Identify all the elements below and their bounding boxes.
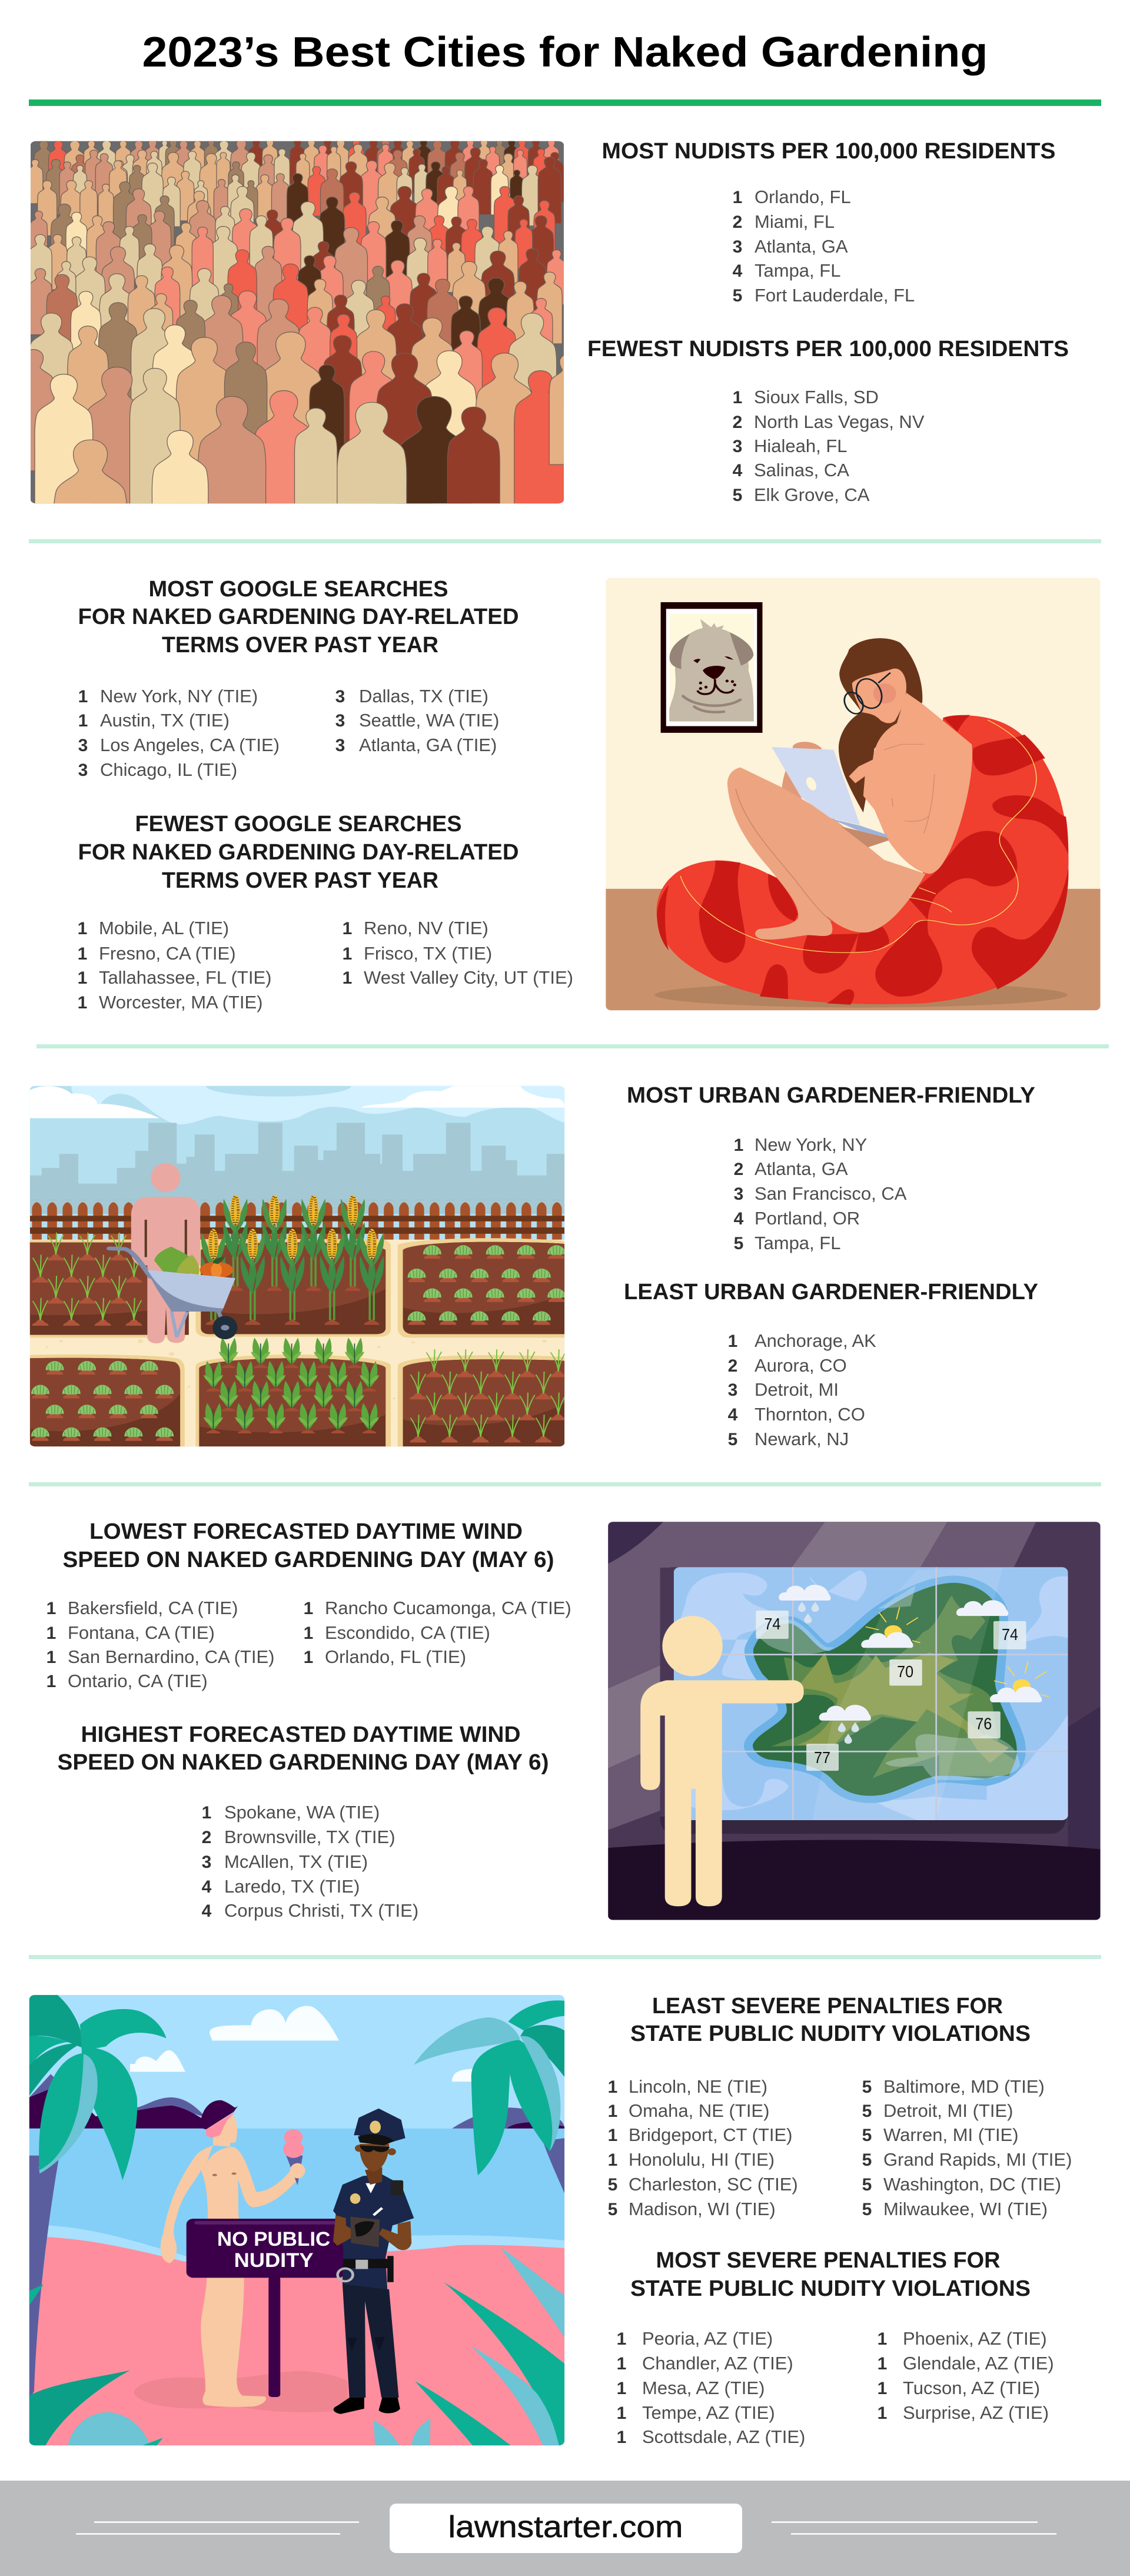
skyline xyxy=(30,1123,564,1214)
list: fewest google searches: 1 xyxy=(343,919,352,938)
list: fewest nudists: 5 xyxy=(733,486,742,505)
list: least severe penalties: 1 xyxy=(608,2102,617,2121)
list: fewest nudists: 3 xyxy=(733,437,742,456)
list: most severe penalties: 1 xyxy=(617,2428,626,2447)
framed dog portrait xyxy=(661,602,763,733)
cabbages xyxy=(31,1245,566,1441)
temperature labels: 76 xyxy=(975,1714,992,1733)
list: lowest wind speed: 1 xyxy=(304,1648,313,1667)
illustration: beach, officer and no public nudity sign xyxy=(29,1995,565,2445)
list: fewest google searches: 1 xyxy=(343,968,352,988)
list: least severe penalties: 5 xyxy=(862,2150,872,2170)
laptop xyxy=(772,747,889,847)
list: most google searches: Los Angeles, CA (TIE) xyxy=(100,735,280,755)
list: fewest google searches: 1 xyxy=(78,944,87,964)
list: most google searches: Austin, TX (TIE) xyxy=(100,710,230,731)
footer: lawnstarter.com xyxy=(448,2510,683,2544)
weather map xyxy=(674,1567,1068,1820)
fence xyxy=(30,1200,564,1241)
list: most google searches: 3 xyxy=(335,687,345,706)
list: most urban gardener-friendly: Tampa, FL xyxy=(755,1233,840,1253)
title: 2023’s Best Cities for Naked Gardening xyxy=(142,29,988,76)
face xyxy=(852,669,906,723)
list: lowest wind speed: 1 xyxy=(46,1648,56,1667)
list: least severe penalties: Honolulu, HI (TIE) xyxy=(629,2149,775,2170)
list: lowest wind speed: 1 xyxy=(46,1599,56,1618)
heading: lowest wind speed: SPEED ON NAKED GARDENING DAY (MAY 6) xyxy=(62,1548,554,1572)
list: least severe penalties: 5 xyxy=(862,2102,872,2121)
list: most google searches: New York, NY (TIE) xyxy=(100,686,258,706)
list: fewest google searches: 1 xyxy=(78,919,87,938)
path speckle xyxy=(46,1339,547,1399)
list: fewest google searches: West Valley City, UT (TIE) xyxy=(364,967,573,988)
sign: no public nudity: NUDITY xyxy=(234,2249,314,2272)
list: least urban gardener-friendly: Newark, NJ xyxy=(755,1429,849,1449)
near leg xyxy=(727,768,926,940)
heading: fewest google searches xyxy=(78,812,519,893)
illustration: crowd of silhouettes xyxy=(31,141,564,504)
heading: most urban gardener-friendly: MOST URBAN GARDENER-FRIENDLY xyxy=(627,1083,1035,1108)
presenter figure xyxy=(640,1616,804,1906)
list: least urban gardener-friendly xyxy=(728,1330,876,1449)
list: highest wind speed xyxy=(202,1802,418,1921)
list: most severe penalties: Glendale, AZ (TIE) xyxy=(903,2353,1054,2373)
heading: most nudists: MOST NUDISTS PER 100,000 RESIDENTS xyxy=(601,139,1056,164)
sign: no public nudity xyxy=(187,2219,345,2397)
list: lowest wind speed: 1 xyxy=(46,1624,56,1643)
list: fewest google searches: Reno, NV (TIE) xyxy=(364,918,488,938)
list: most nudists: Orlando, FL xyxy=(755,187,851,207)
police officer xyxy=(333,2109,414,2414)
list: least severe penalties: Charleston, SC (TIE) xyxy=(629,2174,798,2195)
list: least severe penalties: Warren, MI (TIE) xyxy=(883,2124,1019,2145)
list: most urban gardener-friendly: 1 xyxy=(734,1136,743,1155)
list: most urban gardener-friendly: San Francisco, CA xyxy=(755,1183,907,1204)
list: most severe penalties: 1 xyxy=(878,2329,887,2349)
illustration: weather map presenter xyxy=(608,1522,1101,1920)
list: most severe penalties: Chandler, AZ (TIE) xyxy=(642,2353,793,2373)
list: fewest nudists: Hialeah, FL xyxy=(754,436,848,456)
list: least severe penalties: 5 xyxy=(608,2175,617,2195)
list: most nudists xyxy=(733,187,915,306)
heading: most google searches: TERMS OVER PAST YEAR xyxy=(162,633,438,658)
list: most severe penalties: Tucson, AZ (TIE) xyxy=(903,2378,1040,2398)
heading: fewest google searches: FEWEST GOOGLE SEARCHES xyxy=(135,812,461,836)
list: most google searches: 3 xyxy=(78,761,88,780)
list: most nudists: Fort Lauderdale, FL xyxy=(755,285,915,306)
list: least urban gardener-friendly: Aurora, CO xyxy=(755,1355,847,1376)
title underline xyxy=(29,99,1101,106)
list: least urban gardener-friendly: Anchorage, AK xyxy=(755,1330,876,1351)
list: most urban gardener-friendly: New York, NY xyxy=(755,1134,867,1155)
list: most google searches xyxy=(78,686,499,780)
list: most severe penalties xyxy=(617,2328,1054,2447)
list: most urban gardener-friendly: Portland, OR xyxy=(755,1208,860,1229)
list: least severe penalties: 1 xyxy=(608,2077,617,2097)
wheelbarrow xyxy=(109,1247,237,1339)
list: least severe penalties: Omaha, NE (TIE) xyxy=(629,2100,769,2121)
list: fewest google searches: 1 xyxy=(343,944,352,964)
list: most nudists: Tampa, FL xyxy=(755,260,840,281)
list: lowest wind speed: Rancho Cucamonga, CA (TIE) xyxy=(325,1598,571,1618)
list: most google searches: Chicago, IL (TIE) xyxy=(100,759,237,780)
list: fewest nudists: 1 xyxy=(733,388,742,407)
list: least severe penalties xyxy=(608,2076,1072,2219)
heading: least urban gardener-friendly: LEAST URBAN GARDENER-FRIENDLY xyxy=(624,1280,1038,1304)
leafy plants xyxy=(204,1337,379,1433)
list: most severe penalties: 1 xyxy=(617,2404,626,2423)
list: highest wind speed: Corpus Christi, TX (TIE) xyxy=(224,1900,418,1921)
list: least severe penalties: Lincoln, NE (TIE) xyxy=(629,2076,767,2097)
temperature labels: 74 xyxy=(1002,1625,1018,1644)
list: fewest google searches: Mobile, AL (TIE) xyxy=(99,918,229,938)
list: most severe penalties: 1 xyxy=(617,2329,626,2349)
heading: most google searches: FOR NAKED GARDENING DAY-RELATED xyxy=(78,605,519,629)
list: most google searches: Atlanta, GA (TIE) xyxy=(359,735,497,755)
list: fewest google searches: Fresno, CA (TIE) xyxy=(99,943,236,964)
list: fewest google searches: Tallahassee, FL (TIE) xyxy=(99,967,271,988)
heading: lowest wind speed: LOWEST FORECASTED DAYTIME WIND xyxy=(89,1519,523,1544)
list: fewest google searches: 1 xyxy=(78,968,87,988)
list: fewest nudists: North Las Vegas, NV xyxy=(754,411,925,432)
list: lowest wind speed: Escondido, CA (TIE) xyxy=(325,1622,490,1643)
list: lowest wind speed: 1 xyxy=(46,1672,56,1691)
list: fewest nudists: Sioux Falls, SD xyxy=(754,387,879,407)
list: most nudists: Miami, FL xyxy=(755,211,835,232)
temperature labels: 74 xyxy=(764,1615,780,1633)
list: highest wind speed: 2 xyxy=(202,1828,211,1847)
list: most severe penalties: 1 xyxy=(617,2354,626,2373)
list: most severe penalties: Mesa, AZ (TIE) xyxy=(642,2378,765,2398)
list: highest wind speed: Spokane, WA (TIE) xyxy=(224,1802,380,1823)
list: least severe penalties: 5 xyxy=(862,2077,872,2097)
heading: fewest nudists: FEWEST NUDISTS PER 100,000 RESIDENTS xyxy=(587,337,1069,361)
beanbag xyxy=(657,715,1069,1005)
onions xyxy=(32,1233,567,1442)
list: most nudists: 5 xyxy=(733,286,742,306)
hair xyxy=(839,638,922,812)
list: least urban gardener-friendly: Thornton, CO xyxy=(755,1404,865,1425)
list: most severe penalties: 1 xyxy=(878,2354,887,2373)
heading: most severe penalties: STATE PUBLIC NUDITY VIOLATIONS xyxy=(630,2276,1031,2301)
list: fewest nudists: Elk Grove, CA xyxy=(754,484,870,505)
list: lowest wind speed: Bakersfield, CA (TIE) xyxy=(68,1598,238,1618)
temperature labels: 70 xyxy=(897,1662,913,1681)
list: least severe penalties: 5 xyxy=(862,2126,872,2145)
list: most urban gardener-friendly: 3 xyxy=(734,1184,743,1204)
list: most nudists: 4 xyxy=(733,261,743,281)
sign: no public nudity: NO PUBLIC xyxy=(217,2228,330,2250)
heading: most severe penalties xyxy=(630,2248,1031,2301)
list: least severe penalties: Detroit, MI (TIE) xyxy=(883,2100,1013,2121)
list: highest wind speed: 4 xyxy=(202,1877,212,1897)
list: least severe penalties: Milwaukee, WI (TIE) xyxy=(883,2199,1048,2219)
list: fewest nudists: Salinas, CA xyxy=(754,460,849,480)
weather icons xyxy=(779,1585,1049,1744)
footer xyxy=(0,2481,1130,2576)
list: most google searches: 1 xyxy=(78,711,88,731)
list: lowest wind speed: Ontario, CA (TIE) xyxy=(68,1671,208,1691)
heading: least severe penalties: STATE PUBLIC NUDITY VIOLATIONS xyxy=(630,2021,1031,2046)
glasses xyxy=(841,673,890,716)
torso xyxy=(849,693,972,874)
heading: highest wind speed xyxy=(58,1722,549,1775)
list: most nudists: 3 xyxy=(733,237,742,257)
list: most urban gardener-friendly: 5 xyxy=(734,1234,743,1253)
list: fewest nudists: 4 xyxy=(733,461,743,480)
list: least severe penalties: Grand Rapids, MI (TIE) xyxy=(883,2149,1072,2170)
list: least urban gardener-friendly: 3 xyxy=(728,1380,737,1400)
list: highest wind speed: 4 xyxy=(202,1901,212,1921)
list: fewest google searches: Worcester, MA (TIE) xyxy=(99,992,262,1013)
list: lowest wind speed: 1 xyxy=(304,1624,313,1643)
palm tree left xyxy=(29,1995,167,2400)
list: most urban gardener-friendly: Atlanta, GA xyxy=(755,1158,848,1179)
list: most urban gardener-friendly: 2 xyxy=(734,1160,743,1179)
list: most severe penalties: Tempe, AZ (TIE) xyxy=(642,2402,775,2423)
list: most nudists: 2 xyxy=(733,213,742,232)
list: highest wind speed: Laredo, TX (TIE) xyxy=(224,1876,360,1897)
palm tree right xyxy=(414,2000,564,2193)
list: highest wind speed: 1 xyxy=(202,1803,211,1823)
list: most google searches: 3 xyxy=(335,711,345,731)
list: most google searches: 1 xyxy=(78,687,88,706)
heading: fewest google searches: TERMS OVER PAST YEAR xyxy=(162,868,438,893)
illustration: woman on beanbag with laptop xyxy=(606,578,1101,1010)
list: least urban gardener-friendly: Detroit, MI xyxy=(755,1379,839,1400)
heading: fewest google searches: FOR NAKED GARDENING DAY-RELATED xyxy=(78,840,519,865)
list: fewest nudists: 2 xyxy=(733,413,742,432)
list: most severe penalties: Phoenix, AZ (TIE) xyxy=(903,2328,1047,2349)
list: lowest wind speed: Orlando, FL (TIE) xyxy=(325,1646,466,1667)
list: most severe penalties: Scottsdale, AZ (TIE) xyxy=(642,2426,805,2447)
stitching xyxy=(680,720,1036,952)
list: most severe penalties: 1 xyxy=(617,2379,626,2398)
heading: most google searches xyxy=(78,577,519,658)
foreground leaves xyxy=(29,2247,564,2449)
list: most severe penalties: 1 xyxy=(878,2379,887,2398)
heading: least severe penalties: LEAST SEVERE PENALTIES FOR xyxy=(652,1994,1003,2019)
list: lowest wind speed: Fontana, CA (TIE) xyxy=(68,1622,215,1643)
heading: lowest wind speed xyxy=(62,1519,554,1572)
illustration: urban garden xyxy=(29,1085,565,1447)
list: most severe penalties: Surprise, AZ (TIE) xyxy=(903,2402,1049,2423)
list: least severe penalties: 5 xyxy=(608,2200,617,2219)
gardener figure xyxy=(131,1163,200,1343)
list: most severe penalties: Peoria, AZ (TIE) xyxy=(642,2328,773,2349)
list: most urban gardener-friendly: 4 xyxy=(734,1209,744,1229)
list: most google searches: 3 xyxy=(78,736,88,755)
list: least severe penalties: Madison, WI (TIE) xyxy=(629,2199,776,2219)
list: most urban gardener-friendly xyxy=(734,1134,907,1253)
temperature labels: 77 xyxy=(814,1748,830,1767)
list: highest wind speed: McAllen, TX (TIE) xyxy=(224,1851,368,1872)
list: fewest google searches: Frisco, TX (TIE) xyxy=(364,943,492,964)
list: least severe penalties: 5 xyxy=(862,2200,872,2219)
list: fewest google searches xyxy=(78,918,573,1013)
list: least urban gardener-friendly: 2 xyxy=(728,1356,737,1376)
list: most google searches: 3 xyxy=(335,736,345,755)
list: least severe penalties: Bridgeport, CT (TIE) xyxy=(629,2124,793,2145)
list: most nudists: 1 xyxy=(733,188,742,207)
list: least severe penalties: 5 xyxy=(862,2175,872,2195)
far knee xyxy=(782,742,822,799)
list: least urban gardener-friendly: 4 xyxy=(728,1405,738,1425)
temperature labels xyxy=(756,1611,1026,1771)
list: highest wind speed: 3 xyxy=(202,1853,211,1872)
list: least severe penalties: 1 xyxy=(608,2150,617,2170)
list: least severe penalties: 1 xyxy=(608,2126,617,2145)
heading: most severe penalties: MOST SEVERE PENALTIES FOR xyxy=(656,2248,1001,2273)
list: lowest wind speed: 1 xyxy=(304,1599,313,1618)
list: most google searches: Seattle, WA (TIE) xyxy=(359,710,499,731)
garden beds xyxy=(23,1238,564,1450)
list: least urban gardener-friendly: 5 xyxy=(728,1430,737,1449)
list: least severe penalties: Baltimore, MD (TIE) xyxy=(883,2076,1045,2097)
list: lowest wind speed: San Bernardino, CA (TIE) xyxy=(68,1646,274,1667)
list: least urban gardener-friendly: 1 xyxy=(728,1332,737,1351)
list: least severe penalties: Washington, DC (TIE) xyxy=(883,2174,1061,2195)
list: fewest nudists xyxy=(733,387,925,505)
list: fewest google searches: 1 xyxy=(78,993,87,1013)
list: most google searches: Dallas, TX (TIE) xyxy=(359,686,488,706)
list: lowest wind speed xyxy=(46,1598,571,1691)
list: highest wind speed: Brownsville, TX (TIE) xyxy=(224,1827,396,1847)
corn xyxy=(201,1195,384,1325)
list: most nudists: Atlanta, GA xyxy=(755,236,848,257)
nude man with ice cream xyxy=(161,2100,305,2407)
heading: least severe penalties xyxy=(630,1994,1031,2046)
heading: highest wind speed: SPEED ON NAKED GARDENING DAY (MAY 6) xyxy=(58,1750,549,1775)
heading: highest wind speed: HIGHEST FORECASTED DAYTIME WIND xyxy=(81,1722,520,1747)
list: most severe penalties: 1 xyxy=(878,2404,887,2423)
heading: most google searches: MOST GOOGLE SEARCHES xyxy=(148,577,448,602)
